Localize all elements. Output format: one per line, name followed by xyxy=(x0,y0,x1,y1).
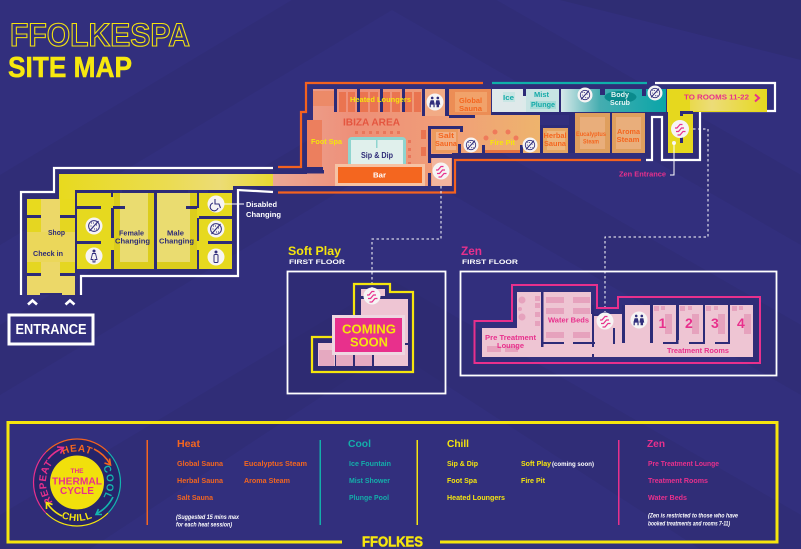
icon: wc ibiza xyxy=(426,94,444,110)
ibiza labels: Herbal xyxy=(544,131,566,140)
plunge pool: sip and dip: Sip & Dip xyxy=(361,151,393,160)
legend: heat column: Eucalyptus Steam xyxy=(244,461,307,468)
thermal cycle diagram: CYCLE xyxy=(60,486,94,497)
zen heading xyxy=(461,246,518,266)
ibiza labels: Sauna xyxy=(435,139,458,148)
icon: female toilet xyxy=(86,248,102,264)
zen entrance callout xyxy=(619,141,676,178)
title xyxy=(8,17,190,84)
legend: cool column xyxy=(320,438,391,525)
ground floor: changing and entrance xyxy=(27,174,273,295)
thermal cycle diagram: CHILL xyxy=(62,512,92,521)
legend: chill column: Foot Spa xyxy=(447,478,477,485)
icon: stairs in zen xyxy=(596,312,614,330)
legend: heat column: (Suggested 15 mins max xyxy=(176,515,240,521)
title: SITE MAP xyxy=(8,52,132,84)
legend: chill column: Fire Pit xyxy=(521,478,546,485)
panel: zen floor plan: 2 xyxy=(685,315,693,331)
panel: legend frame xyxy=(8,422,777,542)
title: FFOLKESPA xyxy=(10,17,190,53)
legend: cool column: Ice Fountain xyxy=(349,461,391,468)
ibiza labels: Aroma xyxy=(617,127,641,136)
legend: chill column: (coming soon) xyxy=(552,461,594,468)
coming soon sign: COMING xyxy=(342,322,396,336)
zen entrance callout: Zen Entrance xyxy=(619,172,666,178)
legend: zen column xyxy=(618,438,739,528)
ibiza labels: Foot Spa xyxy=(311,137,343,146)
disabled changing callout: Disabled xyxy=(246,202,277,209)
legend: chill column: Soft Play xyxy=(521,461,551,468)
soft play heading: Soft Play xyxy=(288,246,342,258)
thermal cycle diagram: REPEAT xyxy=(39,460,52,504)
ground floor labels: Check in xyxy=(33,249,63,258)
icon: stairs to zen xyxy=(671,120,689,138)
icon: shower fire pit xyxy=(522,138,538,152)
panel: zen floor plan: Lounge xyxy=(497,341,524,350)
ground floor labels xyxy=(33,228,194,258)
ibiza labels: IBIZA AREA xyxy=(343,116,400,128)
soft play heading: FIRST FLOOR xyxy=(289,259,345,266)
ground floor labels: Changing xyxy=(159,236,194,246)
plunge pool: sip and dip xyxy=(348,137,406,165)
cool band: ice, mist, plunge, body scrub xyxy=(492,89,666,112)
icon: wc in zen xyxy=(630,312,648,328)
thermal cycle diagram xyxy=(32,438,122,527)
panel: zen floor plan: 3 xyxy=(711,315,719,331)
ibiza labels: Steam xyxy=(583,140,599,146)
bar: Bar xyxy=(373,172,386,180)
to rooms corridor: TO ROOMS 11-22 xyxy=(684,92,749,102)
panel: zen floor plan xyxy=(460,272,776,376)
legend: chill column: Chill xyxy=(447,438,469,450)
legend: zen column: Zen xyxy=(647,438,665,450)
panel: zen floor plan: 1 xyxy=(658,315,666,331)
building outlines xyxy=(21,83,775,295)
cool band: ice, mist, plunge, body scrub: Body xyxy=(611,90,630,99)
ibiza area floor xyxy=(273,89,647,186)
ibiza labels: Sauna xyxy=(459,104,483,113)
icon: shower salt sauna xyxy=(464,138,478,152)
ground floor labels: Male xyxy=(167,228,184,238)
legend: zen column: Treatment Rooms xyxy=(648,478,708,485)
panel: zen floor plan: Pre Treatment xyxy=(485,333,537,342)
legend: cool column: Cool xyxy=(348,438,371,450)
ibiza labels: Steam xyxy=(616,135,640,144)
ibiza labels: Global xyxy=(459,96,482,105)
icon: stairs to soft play xyxy=(432,162,450,180)
cool band: ice, mist, plunge, body scrub: Ice xyxy=(503,93,514,102)
panel: zen floor plan: Water Beds xyxy=(548,316,589,324)
ibiza labels: Sauna xyxy=(544,139,567,148)
cool band: ice, mist, plunge, body scrub: Scrub xyxy=(610,98,630,107)
legend: cool column: Mist Shower xyxy=(349,478,390,485)
ground floor labels: Shop xyxy=(48,228,65,237)
thermal cycle diagram: COOL xyxy=(104,466,114,498)
legend: heat column: Salt Sauna xyxy=(177,495,213,502)
entrance sign: ENTRANCE xyxy=(16,322,87,338)
legend: heat column: Heat xyxy=(177,438,201,450)
legend: zen column: Pre Treatment Lounge xyxy=(648,461,719,468)
ground floor labels: Changing xyxy=(115,236,150,246)
soft play heading xyxy=(288,246,345,266)
icon: disabled changing xyxy=(208,196,224,212)
legend: heat column: for each heat session) xyxy=(176,522,232,528)
thermal cycle diagram: THERMAL xyxy=(52,476,102,488)
legend: cool column: Plunge Pool xyxy=(349,495,389,502)
icon: shower right xyxy=(208,220,224,238)
ibiza labels: Eucalyptus xyxy=(576,132,607,138)
icon: male toilet xyxy=(208,248,224,266)
icon: shower end of band xyxy=(648,86,662,100)
icon: shower cool band xyxy=(578,88,592,102)
coming soon sign: SOON xyxy=(350,336,388,350)
legend: heat column: Herbal Sauna xyxy=(177,478,223,485)
legend: zen column: Water Beds xyxy=(648,495,687,502)
legend: heat column xyxy=(146,438,307,528)
legend: heat column: Aroma Steam xyxy=(244,478,290,485)
legend: chill column: Heated Loungers xyxy=(447,495,505,502)
panel: soft play floor plan xyxy=(288,272,446,394)
legend: zen column: (Zen is restricted to those who have xyxy=(648,514,739,520)
ibiza labels: Heated Loungers xyxy=(350,95,411,104)
panel: zen floor plan: Treatment Rooms xyxy=(667,346,729,355)
bar xyxy=(335,164,425,186)
to rooms corridor xyxy=(667,89,767,153)
icon: stairs in soft play xyxy=(364,288,380,304)
coming soon sign xyxy=(334,316,404,354)
cool band: ice, mist, plunge, body scrub: Mist xyxy=(534,90,550,99)
cool band: ice, mist, plunge, body scrub: Plunge xyxy=(531,100,555,109)
ibiza labels: Salt xyxy=(438,131,455,140)
thermal cycle diagram: THE xyxy=(70,468,84,475)
thermal cycle diagram: HEAT xyxy=(62,444,93,454)
ibiza labels: Fire Pit xyxy=(490,138,515,147)
dashed connector: soft play xyxy=(372,186,441,290)
legend: chill column: Sip & Dip xyxy=(447,461,478,468)
legend: chill column xyxy=(416,438,594,525)
legend: zen column: booked treatments and rooms 7-11) xyxy=(648,522,730,528)
ibiza labels xyxy=(311,95,641,148)
legend: heat column: Global Sauna xyxy=(177,461,223,468)
disabled changing callout: Changing xyxy=(246,212,281,219)
entrance sign xyxy=(9,315,93,344)
dashed connector: zen xyxy=(605,129,708,312)
zen heading: FIRST FLOOR xyxy=(462,259,518,266)
icon: shower left xyxy=(86,218,102,234)
panel: zen floor plan: 4 xyxy=(737,315,745,331)
entrance arrows xyxy=(28,300,74,304)
zen heading: Zen xyxy=(461,246,482,258)
ground floor labels: Female xyxy=(119,228,144,238)
disabled changing callout xyxy=(224,202,281,219)
